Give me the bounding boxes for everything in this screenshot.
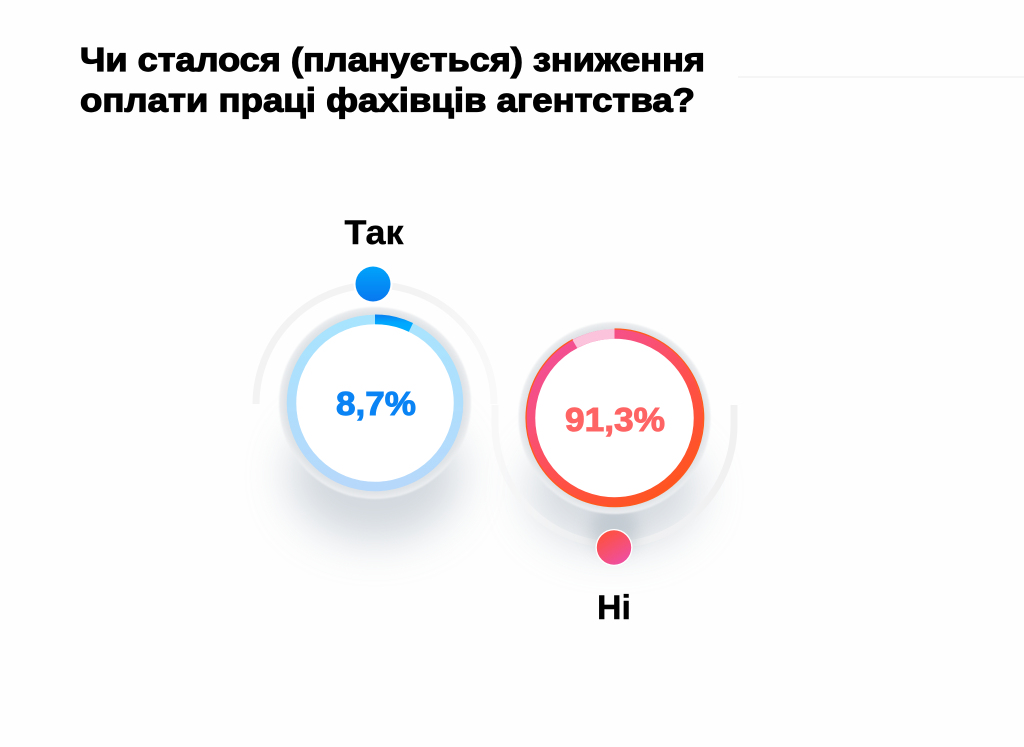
- donut segment: remainder: [572, 329, 614, 348]
- title: Чи сталося (планується) зниження: [80, 42, 705, 79]
- marker: Так: [354, 264, 392, 304]
- marker: Ні: [596, 529, 632, 566]
- donut base: Так: [279, 307, 471, 499]
- donut ring: Так: [292, 320, 458, 486]
- arc: Ні guide: [495, 405, 734, 544]
- arc: Так guide: [256, 285, 494, 404]
- donut edge highlight: [526, 329, 704, 507]
- shadow: Ні donut: [529, 432, 699, 548]
- label: Ні: Ні: [597, 589, 631, 627]
- value: 8,7%: 8,7%: [336, 385, 416, 422]
- donut base: Ні: [518, 322, 710, 514]
- panel: Так donut chart: [256, 214, 494, 540]
- title: [80, 42, 705, 120]
- shadow: Ні marker: [590, 504, 638, 552]
- panel: Ні donut chart: [495, 322, 734, 627]
- title: оплати праці фахівців агентства?: [80, 82, 695, 120]
- shadow: Так donut: [290, 410, 460, 540]
- donut segment: 8,7%: [375, 314, 413, 332]
- label: Так: Так: [344, 214, 405, 252]
- donut ring: Ні: [530, 334, 698, 502]
- value: 91,3%: 91,3%: [565, 401, 665, 438]
